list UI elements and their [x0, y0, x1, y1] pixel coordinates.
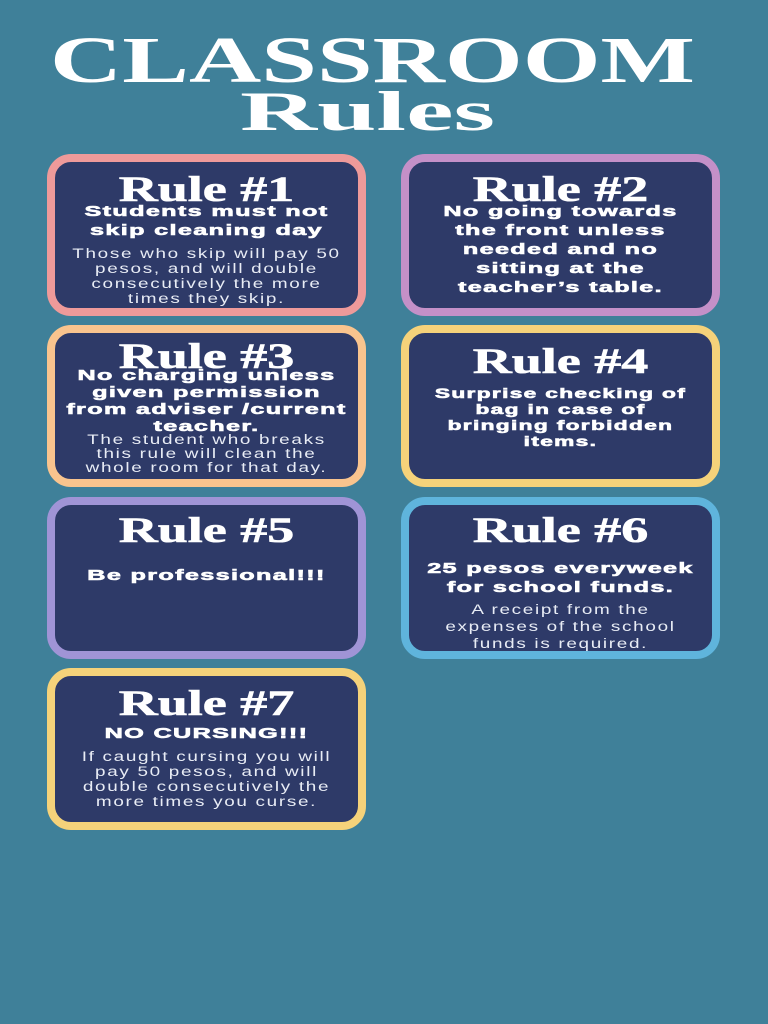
- panel: rule 6: Rule #6: [473, 510, 648, 550]
- panel: rule 3: given permission: [92, 384, 321, 401]
- panel: rule 1: Rule #1: [119, 169, 294, 209]
- panel: rule 3: whole room for that day.: [86, 460, 327, 475]
- panel: rule 6: expenses of the school: [445, 619, 676, 634]
- panel: rule 1: consecutively the more: [91, 276, 322, 291]
- panel: rule 6: for school funds.: [447, 579, 674, 596]
- panel: rule 2: [401, 154, 720, 316]
- panel: rule 4: bringing forbidden: [448, 418, 673, 433]
- panel: rule 1: pesos, and will double: [95, 261, 318, 276]
- panel: rule 4: bag in case of: [475, 402, 646, 417]
- panel: rule 1: Those who skip will pay 50: [72, 246, 341, 261]
- title: CLASSROOM: [50, 24, 695, 97]
- panel: rule 6: 25 pesos everyweek: [427, 560, 694, 577]
- panel: rule 2: teacher’s table.: [458, 279, 663, 296]
- panel: rule 2: No going towards: [443, 203, 678, 220]
- title: [50, 24, 695, 140]
- panel: rule 1: times they skip.: [128, 291, 285, 306]
- panel: rule 3: Rule #3: [119, 336, 294, 376]
- panel: rule 7: double consecutively the: [83, 779, 330, 794]
- panel: rule 4: items.: [524, 434, 597, 449]
- panel: rule 7: NO CURSING!!!: [105, 725, 308, 742]
- panel: rule 3: this rule will clean the: [97, 446, 316, 461]
- panel: rule 7: [47, 668, 366, 830]
- panel: rule 2: Rule #2: [473, 169, 648, 209]
- panel: rule 1: Students must not: [84, 203, 329, 220]
- panel: rule 7: If caught cursing you will: [82, 749, 331, 764]
- panel: rule 6: A receipt from the: [471, 602, 650, 617]
- panel: rule 5: [47, 497, 366, 659]
- panel: rule 6: [401, 497, 720, 659]
- panel: rule 7: more times you curse.: [96, 794, 317, 809]
- panel: rule 2: needed and no: [463, 241, 658, 258]
- panel: rule 3: The student who breaks: [87, 432, 326, 447]
- panel: rule 2: sitting at the: [476, 260, 645, 277]
- panel: rule 3: teacher.: [153, 418, 259, 435]
- panel: rule 1: [47, 154, 366, 316]
- panel: rule 7: Rule #7: [119, 683, 294, 723]
- panel: rule 5: Rule #5: [119, 510, 294, 550]
- panel: rule 3: [47, 325, 366, 487]
- panel: rule 4: Rule #4: [473, 341, 648, 381]
- panel: rule 3: from adviser /current: [66, 401, 347, 418]
- panel: rule 4: [401, 325, 720, 487]
- panel: rule 5: Be professional!!!: [87, 567, 326, 584]
- panel: rule 3: No charging unless: [77, 367, 336, 384]
- panel: rule 6: funds is required.: [473, 636, 648, 651]
- panel: rule 2: the front unless: [455, 222, 666, 239]
- panel: rule 1: skip cleaning day: [90, 222, 323, 239]
- panel: rule 7: pay 50 pesos, and will: [95, 764, 318, 779]
- panel: rule 4: Surprise checking of: [435, 386, 686, 401]
